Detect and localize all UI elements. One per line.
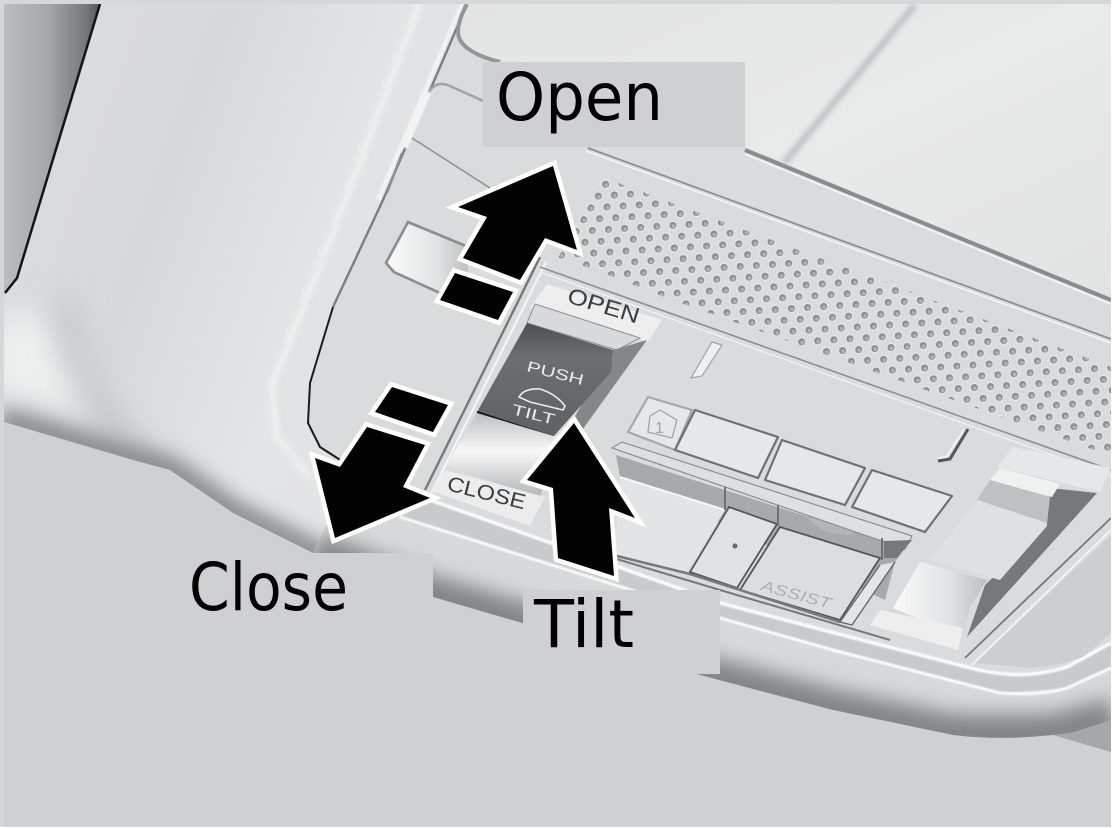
- console inner panel: [308, 4, 1111, 677]
- switch: close label: CLOSE: [445, 473, 528, 514]
- right lower panel: [965, 518, 1111, 668]
- dark window pillar: [4, 4, 100, 293]
- label: open: Open: [496, 59, 663, 136]
- switch: close button: [445, 413, 560, 497]
- label: open: [483, 59, 745, 147]
- switch: tilt text: TILT: [510, 401, 557, 429]
- button: home icon: [628, 397, 692, 450]
- lower console bands: [313, 500, 1111, 738]
- right map light switch: [870, 447, 1111, 650]
- button: home icon: 1: [655, 420, 664, 437]
- switch: close label: [432, 470, 545, 526]
- speaker grille: [558, 178, 1111, 456]
- switch: push text: PUSH: [525, 358, 585, 389]
- switch: top lip: [527, 304, 640, 350]
- switch: open label strip: OPEN: [565, 283, 643, 328]
- switch: open label strip: [530, 283, 662, 342]
- overhead console body: [4, 4, 1054, 692]
- switch: car icon: [519, 389, 565, 410]
- upper button row: [628, 397, 952, 532]
- map light lens left: [386, 222, 470, 295]
- label: close: Close: [189, 549, 348, 626]
- label: tilt: Tilt: [533, 586, 634, 663]
- lower button bank: [612, 442, 912, 625]
- groove line: [332, 24, 457, 308]
- switch: dark face: [477, 323, 613, 437]
- arrow: close: [315, 387, 448, 538]
- arrow: tilt: [527, 423, 635, 576]
- rear wedge of headliner: [1053, 720, 1111, 752]
- label: close: [192, 553, 433, 611]
- indicator slot: [691, 342, 722, 378]
- button: one: [675, 410, 778, 478]
- top display recess: [387, 4, 1111, 343]
- console outer band: [270, 4, 1111, 660]
- switch: side wall: [575, 340, 647, 429]
- label: tilt: [523, 586, 720, 674]
- button text: assist: ASSIST: [758, 577, 835, 613]
- indicator slot right: [938, 429, 968, 461]
- centre strip lines: [425, 257, 1111, 640]
- button: three: [852, 470, 952, 532]
- arrow: open: [440, 166, 577, 320]
- moonroof switch: [432, 283, 662, 526]
- button: two: [765, 440, 865, 505]
